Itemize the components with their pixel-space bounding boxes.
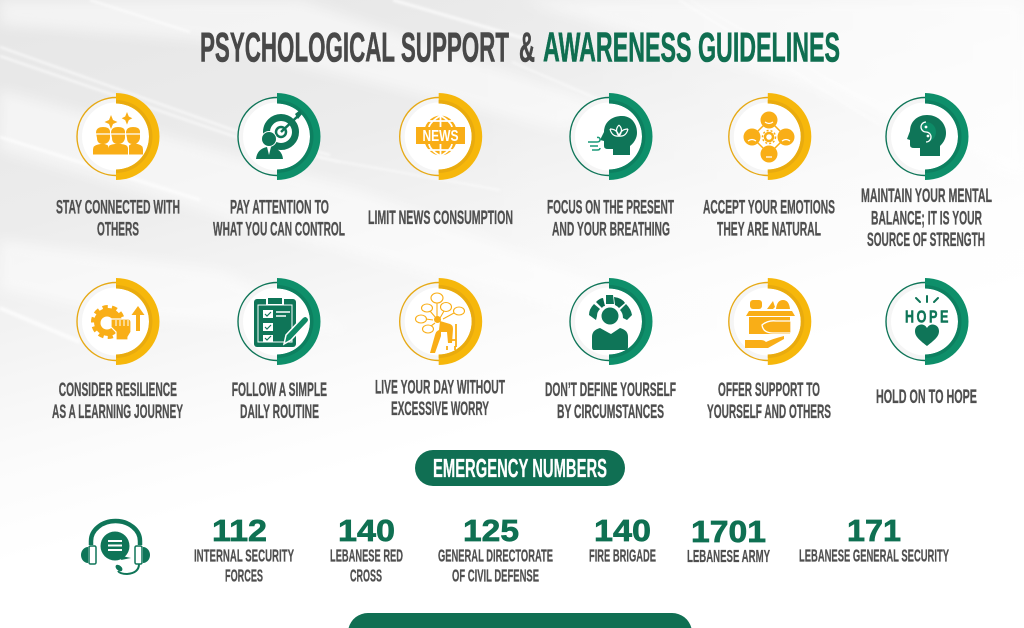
label: pay attention: PAY ATTENTION TO [230,196,329,218]
panel: hold on to hope [886,278,968,365]
number: civil defense: GENERAL DIRECTORATE [438,546,553,566]
label: offer support: OFFER SUPPORT TO [718,379,820,401]
icon: clipboard checklist and pencil [254,296,309,347]
number: lebanese army: LEBANESE ARMY [687,546,770,566]
title: & [519,24,535,70]
icon: three people [93,112,143,154]
icon: hope with heart: P [929,306,938,326]
icon: news globe: NEWS [422,128,458,145]
icon: worried person and thought bubbles [416,293,464,353]
label: don't define yourself [545,379,676,423]
label: stay connected [56,196,180,240]
number: civil defense [438,513,553,586]
label: offer support [707,379,831,423]
number: lebanese red cross: CROSS [350,566,382,586]
number: fire brigade: FIRE BRIGADE [589,546,656,566]
label: pay attention [213,196,345,240]
label: don't define yourself: DON’T DEFINE YOURSELF [545,379,676,401]
label: resilience: CONSIDER RESILIENCE [59,379,177,401]
label: resilience [52,379,183,423]
number: internal security forces: 112 [212,513,267,548]
icon: head with yin yang [907,115,946,156]
label: don't define yourself: BY CIRCUMSTANCES [557,401,664,423]
number: lebanese red cross: 140 [338,513,395,548]
number: lebanese red cross: LEBANESE RED [330,546,403,566]
panel: without worry [400,278,482,365]
number: internal security forces: INTERNAL SECURITY [194,546,294,566]
panel: pay attention [238,93,320,180]
label: pay attention: WHAT YOU CAN CONTROL [213,218,345,240]
label: accept emotions [703,196,835,240]
label: stay connected: STAY CONNECTED WITH [56,196,180,218]
label: focus on present [547,196,674,240]
number: lebanese army: 1701 [691,514,766,549]
label: stay connected: OTHERS [97,218,139,240]
number: civil defense: 125 [463,513,519,548]
label: without worry: EXCESSIVE WORRY [391,398,489,420]
number: internal security forces: FORCES [225,566,263,586]
label: resilience: AS A LEARNING JOURNEY [52,401,183,423]
label: limit news: LIMIT NEWS CONSUMPTION [368,207,513,229]
label: focus on present: FOCUS ON THE PRESENT [547,196,674,218]
number: fire brigade: 140 [594,513,651,548]
number: general security [799,513,949,566]
number: lebanese red cross [330,513,403,586]
number: fire brigade [589,513,656,566]
icon: headset with chat bubble [81,521,150,574]
panel: daily routine [238,278,320,365]
label: daily routine: DAILY ROUTINE [240,401,319,423]
title: PSYCHOLOGICAL SUPPORT [200,24,509,70]
icon: gear, fist and arrow [94,306,144,340]
number: lebanese army [687,514,770,566]
panel: mental balance [886,93,968,180]
panel: don't define yourself [570,278,652,365]
panel: stay connected [77,93,160,180]
panel: focus on present [570,93,652,180]
emergency numbers pill: EMERGENCY NUMBERS [433,453,607,483]
panel: accept emotions [729,93,811,180]
label: offer support: YOURSELF AND OTHERS [707,401,831,423]
panel: resilience [77,278,160,365]
icon: hope with heart: H [905,306,914,326]
panel: limit news [400,93,482,180]
label: without worry [375,376,505,420]
label: daily routine [232,379,327,423]
label: mental balance [861,185,992,251]
icon: hope with heart [905,296,948,346]
icon: four faces and gear [744,112,794,162]
label: daily routine: FOLLOW A SIMPLE [232,379,327,401]
icon: hope with heart: E [940,306,948,326]
number: internal security forces [194,513,294,586]
icon: food box and hands [745,300,795,348]
bottom pill [349,613,691,628]
label: focus on present: AND YOUR BREATHING [552,218,670,240]
icon: hope with heart: O [916,306,926,326]
icon: target and person [256,110,302,159]
icon: person with arcs [589,295,632,350]
emergency numbers pill [415,450,625,486]
number: general security: 171 [847,513,901,548]
label: accept emotions: ACCEPT YOUR EMOTIONS [703,196,835,218]
label: without worry: LIVE YOUR DAY WITHOUT [375,376,505,398]
number: civil defense: OF CIVIL DEFENSE [452,566,539,586]
label: accept emotions: THEY ARE NATURAL [717,218,821,240]
panel: offer support [729,278,811,365]
icon: breathing head with lotus [588,116,637,155]
